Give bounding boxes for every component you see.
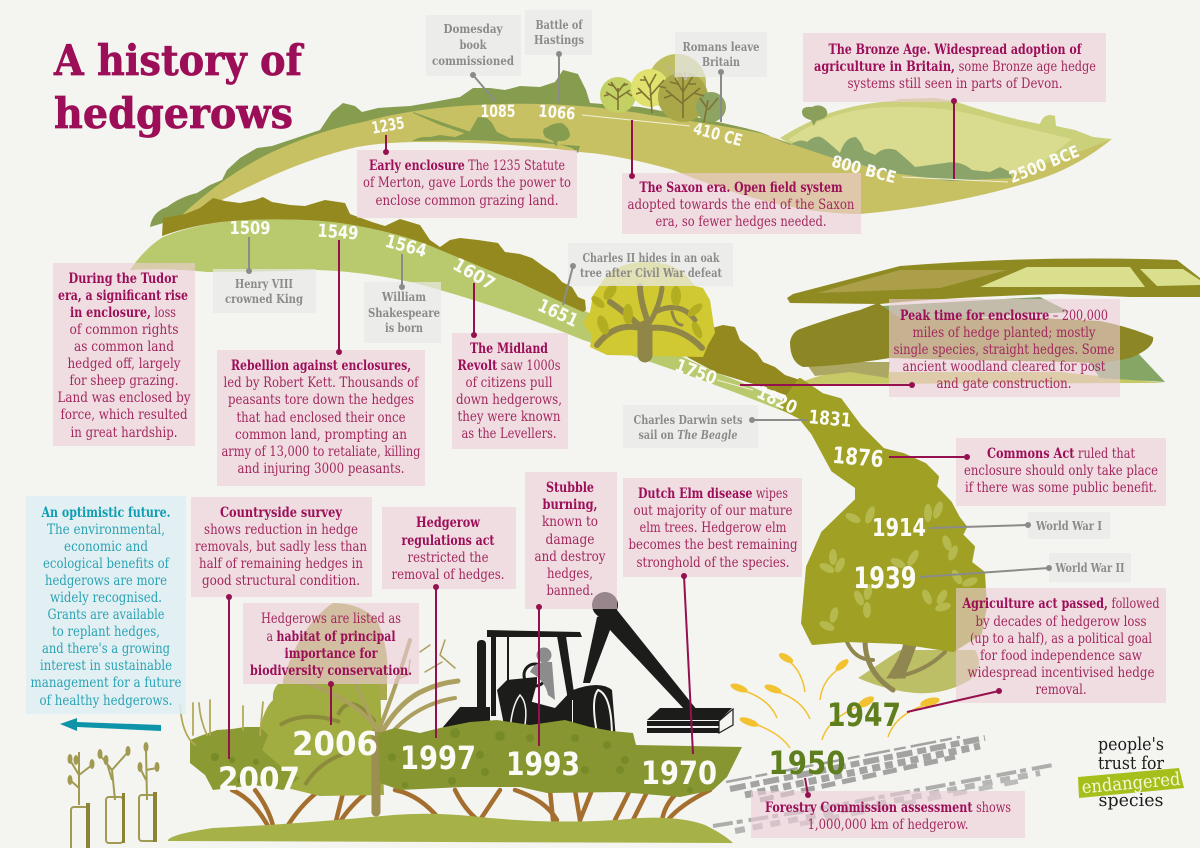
panel: habitat listing: biodiversity conservation. xyxy=(250,663,412,679)
panel: hedgerow regulations: regulations act xyxy=(402,533,495,549)
panel: rebellion against enclosures: peasants tore down the hedges xyxy=(228,392,414,408)
panel: dutch elm disease xyxy=(623,478,802,577)
panel: commons act: enclosure should only take place xyxy=(964,463,1158,479)
panel: dutch elm disease: stronghold of the species. xyxy=(636,555,790,571)
panel: midland revolt: The Midland xyxy=(470,341,548,357)
tree guards with saplings xyxy=(68,742,160,848)
panel: bronze age xyxy=(803,33,1106,102)
label: domesday book xyxy=(426,15,521,76)
panel: commons act: if there was some public benefit. xyxy=(965,480,1157,496)
year labels: 1509 xyxy=(230,218,270,239)
landscape: enclosed fields, top right xyxy=(787,258,1200,384)
panel: an optimistic future: ecological benefits of xyxy=(43,556,170,572)
panel: peak time for enclosure: single species, straight hedges. Some xyxy=(894,342,1115,358)
panel: hedgerow regulations: Hedgerow xyxy=(416,515,480,531)
panel: early enclosure: enclose common grazing land. xyxy=(376,193,558,209)
panel: tudor era: Land was enclosed by xyxy=(58,390,191,406)
panel: commons act xyxy=(956,438,1166,506)
panel: midland revolt: down hedgerows, xyxy=(456,392,562,408)
panel: countryside survey: shows reduction in hedge xyxy=(204,522,358,538)
panel: forestry commission: Forestry Commission assessment shows xyxy=(765,800,1011,816)
label: william shakespeare: Shakespeare xyxy=(368,305,440,320)
panel: tudor era: in great hardship. xyxy=(70,425,178,441)
year labels: 2006 xyxy=(292,724,378,763)
year labels xyxy=(218,101,1082,798)
logo: people's trust for endangered species xyxy=(1078,734,1184,811)
big tree xyxy=(780,380,985,693)
panel: early enclosure xyxy=(357,150,577,218)
panel: bronze age: systems still seen in parts of Devon. xyxy=(848,76,1062,92)
panel: midland revolt xyxy=(452,333,568,449)
label: charles darwin xyxy=(623,405,758,448)
panel: countryside survey: Countryside survey xyxy=(220,505,343,521)
label: battle of hastings xyxy=(525,10,592,55)
panel: stubble burning: damage xyxy=(546,532,595,548)
trees on the hill xyxy=(600,54,726,122)
panel: habitat listing: a habitat of principal xyxy=(266,629,396,645)
label: battle of hastings: Hastings xyxy=(534,32,584,47)
panel: peak time for enclosure: and gate construction. xyxy=(936,376,1072,392)
panel: dutch elm disease: elm trees. Hedgerow elm xyxy=(640,520,787,536)
panel: an optimistic future: The environmental, xyxy=(47,522,165,538)
panel: an optimistic future: to replant hedges, xyxy=(52,624,160,640)
label: world war i xyxy=(1028,512,1110,539)
year labels: 1876 xyxy=(831,443,884,473)
logo: people's trust for endangered species: species xyxy=(1098,790,1164,811)
label: romans leave britain: Britain xyxy=(702,54,740,69)
label: william shakespeare: William xyxy=(381,289,426,304)
label: william shakespeare xyxy=(364,282,441,343)
panel: an optimistic future: management for a future xyxy=(30,675,182,691)
year labels: 2500 BCE xyxy=(1006,142,1082,187)
label: charles darwin: Charles Darwin sets xyxy=(634,412,742,427)
panel: tudor era: of common rights xyxy=(70,322,179,338)
hedge: left, olive bush xyxy=(190,684,384,796)
label: charles ii: Charles II hides in an oak xyxy=(582,250,720,265)
year labels: 1651 xyxy=(534,295,581,332)
fine timeline lines xyxy=(582,115,1008,390)
year labels: 1997 xyxy=(400,739,476,777)
year labels: 410 CE xyxy=(691,119,744,150)
year labels: 1993 xyxy=(506,745,580,783)
year labels: 1066 xyxy=(538,101,576,124)
panel: saxon era xyxy=(622,173,861,234)
title: hedgerows xyxy=(54,89,293,138)
year labels: 1970 xyxy=(641,754,717,792)
teal arrow xyxy=(60,718,161,731)
label: charles ii: tree after Civil War defeat xyxy=(580,265,722,280)
label: romans leave britain xyxy=(675,32,767,77)
label: henry viii xyxy=(213,269,316,313)
tractor driver and wheel detail xyxy=(510,648,733,738)
panel: peak time for enclosure: miles of hedge planted; mostly xyxy=(912,325,1096,341)
panel: an optimistic future: of healthy hedgerows. xyxy=(40,693,172,709)
panel: commons act: Commons Act ruled that xyxy=(987,446,1135,462)
panel: agriculture act: Agriculture act passed, followed xyxy=(962,596,1160,612)
panel: habitat listing xyxy=(243,603,419,684)
panel: early enclosure: Early enclosure The 1235 Statute xyxy=(369,158,565,174)
label: charles ii xyxy=(568,243,733,286)
year labels: 1549 xyxy=(317,221,359,244)
panel: an optimistic future: economic and xyxy=(64,539,148,555)
label: henry viii: crowned King xyxy=(225,291,303,306)
label: william shakespeare: is born xyxy=(385,320,423,335)
panel: agriculture act: widespread incentivised hedge xyxy=(968,665,1155,681)
year labels: 1950 xyxy=(768,744,846,782)
panel: tudor era: hedged off, largely xyxy=(68,356,181,372)
panel: forestry commission xyxy=(751,791,1025,838)
year labels: 1607 xyxy=(449,254,498,295)
panel: agriculture act: by decades of hedgerow loss xyxy=(976,614,1147,630)
panel: midland revolt: as the Levellers. xyxy=(462,426,556,442)
year labels: 1564 xyxy=(383,231,429,262)
label: charles darwin: sail on The Beagle xyxy=(638,427,738,442)
panel: peak time for enclosure: Peak time for enclosure – 200,000 xyxy=(900,308,1108,324)
panel: an optimistic future: hedgerows are more xyxy=(45,573,167,589)
panel: tudor era: in enclosure, loss xyxy=(70,305,176,321)
panel: rebellion against enclosures: army of 13,000 to retaliate, killing xyxy=(222,444,421,460)
panel: stubble burning xyxy=(525,472,617,609)
landscape: upper timeline band with hedges xyxy=(150,70,1112,227)
panel: countryside survey xyxy=(191,497,372,597)
year labels: 1085 xyxy=(480,102,516,121)
year labels: 1831 xyxy=(808,406,852,432)
panel: agriculture act: for food independence saw xyxy=(980,648,1142,664)
panel: rebellion against enclosures: that had enclosed their once xyxy=(236,410,406,426)
panel: tudor era: force, which resulted xyxy=(60,407,188,423)
panel: agriculture act: removal. xyxy=(1036,682,1086,698)
panel: an optimistic future: interest in sustainable xyxy=(40,658,172,674)
wheat xyxy=(729,651,941,748)
title xyxy=(53,36,305,138)
panel: dutch elm disease: becomes the best remaining xyxy=(628,537,798,553)
panel: an optimistic future: Grants are available xyxy=(48,607,165,623)
panel: agriculture act: (up to a half), as a political goal xyxy=(970,631,1152,647)
panel: an optimistic future: An optimistic future. xyxy=(41,505,170,521)
panel: midland revolt: they were known xyxy=(458,409,561,425)
landscape: tudor band xyxy=(130,197,800,417)
panel: forestry commission: 1,000,000 km of hedgerow. xyxy=(808,817,968,833)
connectors: crimson xyxy=(226,98,1002,798)
panel: hedgerow regulations xyxy=(382,507,516,589)
year labels: 1820 xyxy=(753,382,800,419)
panel: rebellion against enclosures xyxy=(217,350,425,486)
logo: people's trust for endangered species: endangered xyxy=(1081,769,1181,798)
panel: early enclosure: of Merton, gave Lords the power to xyxy=(363,175,571,191)
label: world war ii: World War II xyxy=(1055,560,1125,575)
panel: stubble burning: and destroy xyxy=(534,549,606,565)
panel: midland revolt: Revolt saw 1000s xyxy=(458,358,561,374)
panel: tudor era xyxy=(53,263,195,446)
year labels: 1235 xyxy=(370,113,406,138)
label: henry viii: Henry VIII xyxy=(235,276,293,291)
central trunk and bare branches xyxy=(180,640,458,812)
label: domesday book: commissioned xyxy=(432,53,514,68)
panel: habitat listing: Hedgerows are listed as xyxy=(261,611,401,627)
ground xyxy=(168,814,733,843)
panel: saxon era: The Saxon era. Open field system xyxy=(640,180,842,196)
panel: peak time for enclosure xyxy=(889,299,1120,397)
panel: hedgerow regulations: restricted the xyxy=(408,550,489,566)
title: A history of xyxy=(53,36,305,85)
logo: people's trust for endangered species: trust for xyxy=(1098,753,1164,774)
panel: countryside survey: removals, but sadly less than xyxy=(195,539,367,555)
year labels: 1750 xyxy=(672,355,720,390)
panel: an optimistic future: widely recognised. xyxy=(50,590,162,606)
tractor xyxy=(443,592,732,740)
year labels: 1939 xyxy=(854,561,916,595)
tree trunks under hedges xyxy=(232,785,710,830)
year labels: 1914 xyxy=(872,513,926,542)
panel: peak time for enclosure: ancient woodland cleared for post xyxy=(902,359,1106,375)
panel: agriculture act xyxy=(956,588,1166,703)
year labels: 1947 xyxy=(827,696,901,734)
oak tree xyxy=(583,262,715,357)
tan bush behind listed box xyxy=(283,603,388,700)
panel: countryside survey: half of remaining hedges in xyxy=(199,556,363,572)
label: romans leave britain: Romans leave xyxy=(682,39,760,54)
label: domesday book: book xyxy=(460,37,487,52)
label: domesday book: Domesday xyxy=(444,21,503,36)
panel: bronze age: The Bronze Age. Widespread adoption of xyxy=(828,42,1082,58)
panel: tudor era: During the Tudor xyxy=(68,271,178,287)
panel: tudor era: for sheep grazing. xyxy=(70,373,178,389)
panel: countryside survey: good structural condition. xyxy=(202,573,360,589)
landscape: bronze age hill xyxy=(780,98,1112,185)
hedge: long olive, being cut xyxy=(211,720,742,797)
panel: an optimistic future xyxy=(26,496,186,714)
panel: habitat listing: importance for xyxy=(284,646,378,662)
panel: stubble burning: Stubble xyxy=(546,480,594,496)
panel: dutch elm disease: Dutch Elm disease wipes xyxy=(638,486,788,502)
panel: stubble burning: banned. xyxy=(546,583,594,599)
panel: an optimistic future: and there's a growing xyxy=(42,641,170,657)
panel: rebellion against enclosures: Rebellion against enclosures, xyxy=(231,358,411,374)
panel: rebellion against enclosures: and injuring 3000 peasants. xyxy=(238,461,404,477)
year labels: 2007 xyxy=(218,760,300,798)
panel: bronze age: agriculture in Britain, some Bronze age hedge xyxy=(814,59,1096,75)
panel: stubble burning: burning, xyxy=(542,497,598,513)
panel: dutch elm disease: out majority of our mature xyxy=(634,503,793,519)
panel: tudor era: as common land xyxy=(74,339,174,355)
panel: tudor era: era, a significant rise xyxy=(58,288,188,304)
panel: hedgerow regulations: removal of hedges. xyxy=(392,567,504,583)
year labels: 800 BCE xyxy=(830,152,898,187)
label: battle of hastings: Battle of xyxy=(536,17,584,32)
panel: saxon era: adopted towards the end of the Saxon xyxy=(628,197,855,213)
panel: rebellion against enclosures: common land, prompting an xyxy=(235,427,407,443)
panel: stubble burning: hedges, xyxy=(547,566,593,582)
label: world war i: World War I xyxy=(1035,518,1102,533)
panel: stubble burning: known to xyxy=(542,514,598,530)
panel: saxon era: era, so fewer hedges needed. xyxy=(656,214,826,230)
panel: midland revolt: of citizens pull xyxy=(466,375,552,391)
label: world war ii xyxy=(1049,553,1131,582)
logo: people's trust for endangered species: people's xyxy=(1098,734,1164,755)
tractor tracks xyxy=(713,737,1053,831)
panel: rebellion against enclosures: led by Robert Kett. Thousands of xyxy=(224,375,419,391)
connectors: grey xyxy=(246,51,1052,577)
